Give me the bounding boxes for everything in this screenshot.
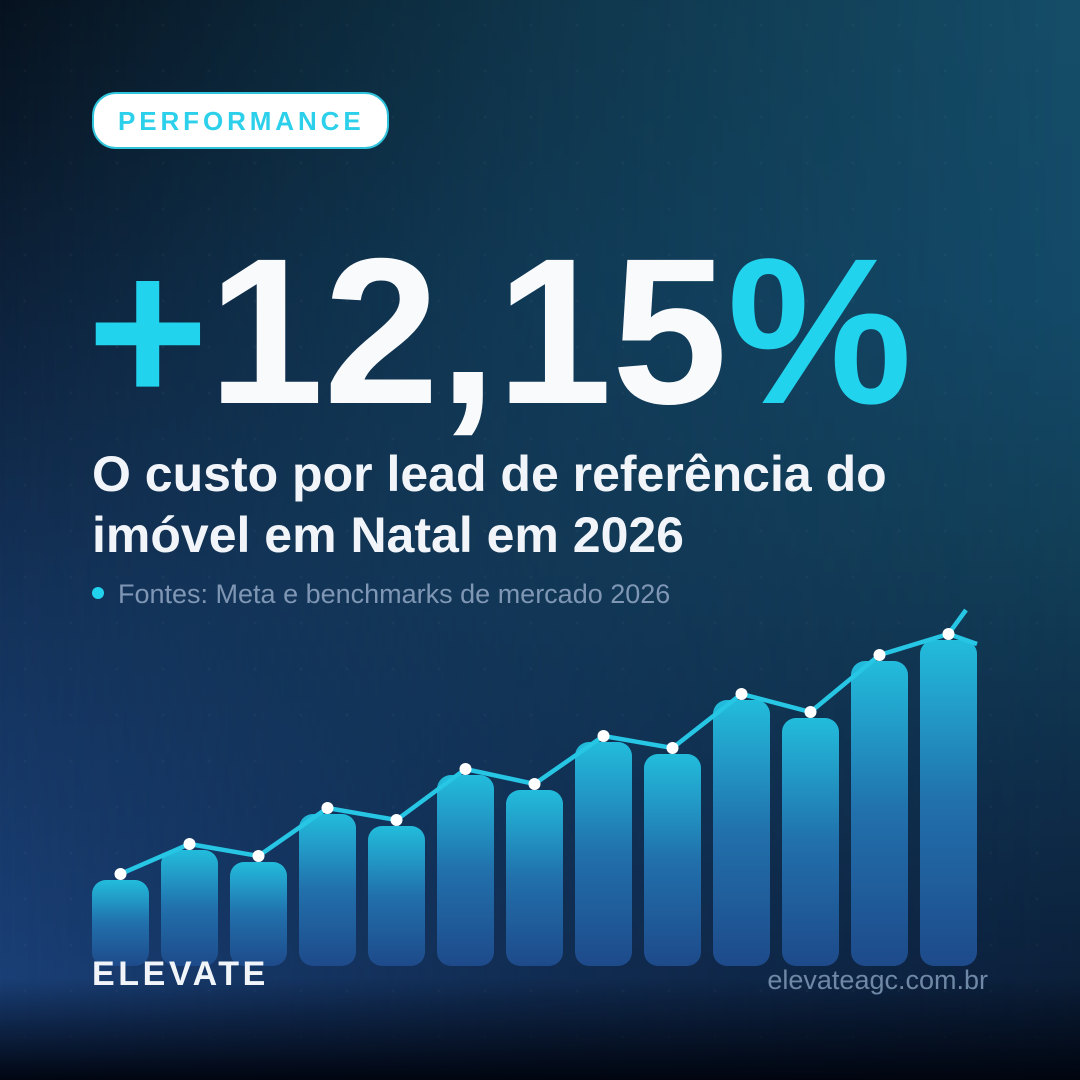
brand: ELEVATE <box>92 955 269 993</box>
sources note: Fontes: Meta e benchmarks de mercado 2026 <box>118 579 670 609</box>
big number: +12,15% <box>87 216 912 448</box>
badge: performance: PERFORMANCE <box>118 106 365 136</box>
heading: O custo por lead de referência do <box>92 446 887 502</box>
heading: imóvel em Natal em 2026 <box>92 507 684 563</box>
heading <box>92 446 887 563</box>
website: elevateagc.com.br <box>767 965 988 995</box>
bottom fade <box>0 978 1080 1080</box>
badge: performance <box>92 92 389 149</box>
